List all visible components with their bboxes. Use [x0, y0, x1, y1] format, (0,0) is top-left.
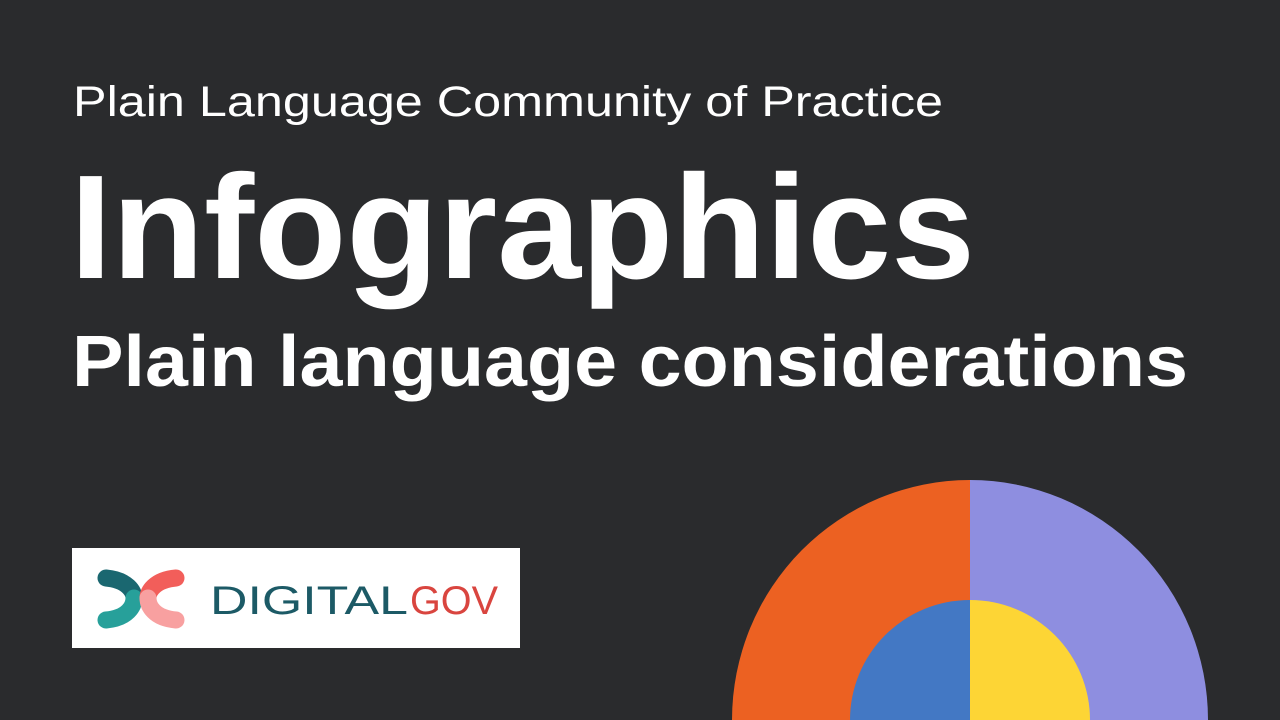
- title: Infographics: [70, 145, 975, 310]
- logo text: DIGITAL: [210, 579, 408, 623]
- subtitle line: community: Plain Language Community of Practice: [73, 78, 943, 126]
- logo: DigitalGov: GOV: [410, 579, 498, 623]
- icon: logo mark: [106, 578, 176, 620]
- subheading: Plain language considerations: [72, 322, 1188, 402]
- chart: semicircle donut: [732, 480, 1208, 720]
- logo: DigitalGov: [72, 548, 520, 648]
